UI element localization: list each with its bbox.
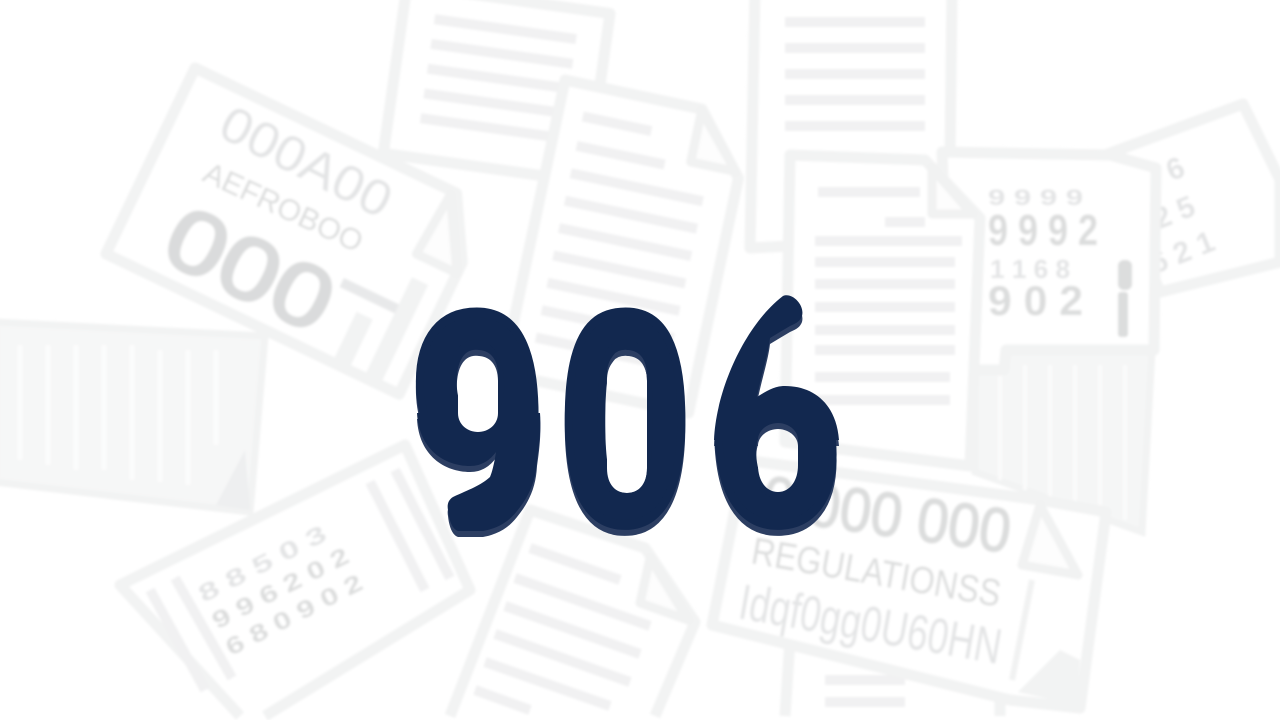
document: right numbers: 1 1 6 8 <box>990 254 1070 284</box>
document: regulations: 0 000 000 <box>758 464 1015 567</box>
document: centre <box>503 80 751 413</box>
document: regulations: REGULATIONSS <box>748 531 1004 616</box>
document: lower centre <box>450 510 695 716</box>
document: left with large numbers: 000A00 <box>211 95 401 229</box>
number shadow layer: 906 <box>412 257 841 592</box>
document: lower left: 6 8 0 9 0 2 <box>221 569 367 662</box>
document: left-middle with vertical bars <box>0 322 265 512</box>
document: right numbers: 9 9 9 9 <box>988 185 1083 210</box>
document: right numbers: 9 0 2 <box>988 277 1083 324</box>
document: right numbers: 9 9 9 2 <box>988 206 1098 255</box>
number main layer <box>416 295 839 531</box>
number main layer: 906 <box>412 251 841 586</box>
document: lower left <box>120 445 470 716</box>
document: bottom partly hidden <box>785 640 1000 716</box>
big number 906 <box>416 295 839 537</box>
document: regulations <box>712 460 1106 708</box>
document: far right tilted numbers <box>1105 104 1280 292</box>
document: lower left: 8 8 5 0 3 <box>194 520 331 608</box>
document: far right tilted numbers: 6 2 1 <box>1145 225 1219 281</box>
document: left with large numbers: AEFROBOO <box>198 156 368 259</box>
document: right middle striped <box>975 345 1152 532</box>
document: left with large numbers: 000 <box>150 186 350 352</box>
number shadow layer <box>416 316 839 537</box>
document: lower left: 9 9 6 2 0 2 <box>208 543 354 635</box>
document: left with large numbers <box>106 68 488 394</box>
document: far right tilted numbers: 8 9 6 <box>1115 151 1189 206</box>
document: top right <box>750 0 952 248</box>
document: top centre-left <box>383 0 610 182</box>
document: regulations: Idqf0gg0U60HN <box>735 574 1006 675</box>
document: far right tilted numbers: 0 2 5 <box>1126 190 1200 245</box>
document: right numbers <box>942 152 1156 370</box>
document: right centre, front page <box>785 155 980 466</box>
